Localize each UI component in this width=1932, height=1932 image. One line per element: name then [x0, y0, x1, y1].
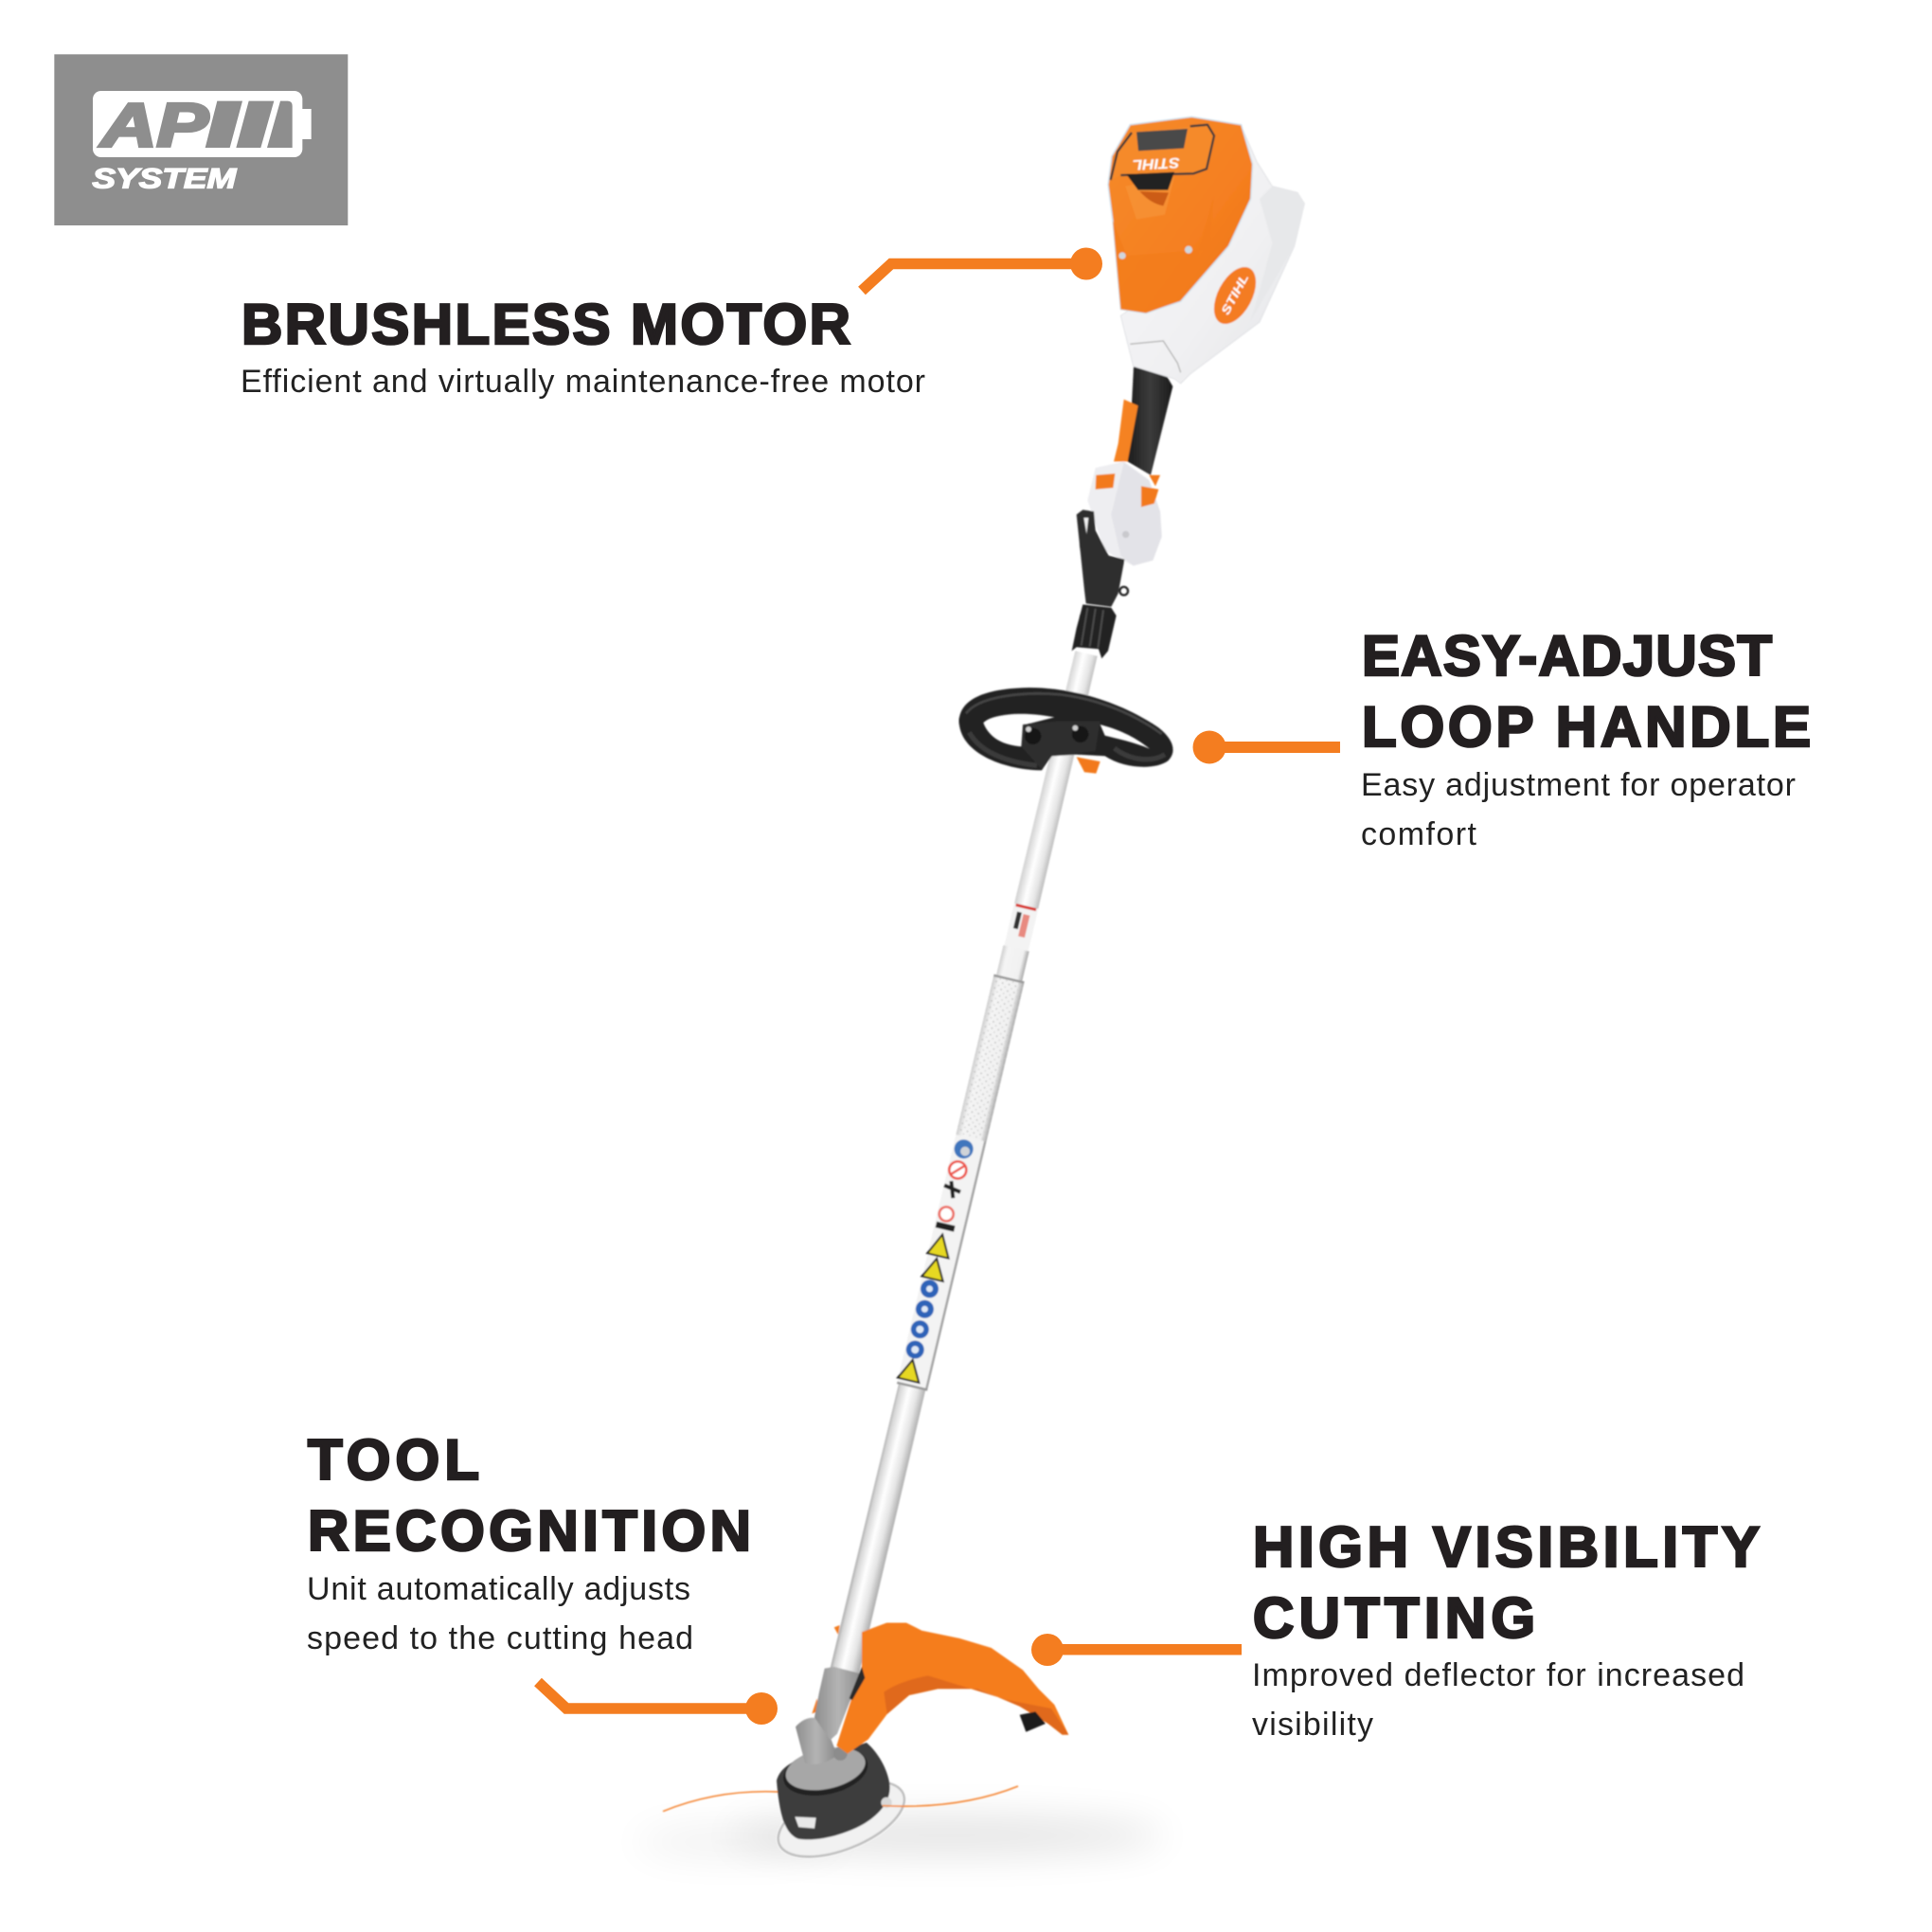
text: high visibility description: visibility — [1252, 1707, 1373, 1743]
heading: tool recognition — [308, 1428, 751, 1563]
logo: AP System badge — [54, 54, 348, 225]
logo text: SYSTEM: SYSTEM — [92, 163, 237, 194]
callout: tool recognition — [307, 1428, 778, 1725]
text: loop handle description — [1361, 767, 1796, 852]
heading: easy-adjust loop handle: LOOP HANDLE — [1362, 695, 1811, 759]
heading: tool recognition: TOOL — [308, 1428, 479, 1492]
black grip — [1128, 363, 1172, 475]
text: tool recognition description — [307, 1571, 693, 1656]
dark spool housing — [777, 1743, 892, 1839]
trimmer line — [663, 1792, 778, 1812]
gear housing dome — [778, 1718, 872, 1803]
text: tool recognition description: speed to the cutting head — [307, 1620, 693, 1656]
brand text on battery: STIHL — [1132, 154, 1180, 172]
loop handle — [959, 688, 1173, 770]
orange throttle lever — [1114, 400, 1138, 461]
ground shadow — [635, 1816, 1165, 1857]
cutting head and deflector — [663, 1622, 1068, 1872]
text: high visibility description: Improved deflector for increased — [1252, 1657, 1744, 1693]
textured sleeve — [956, 975, 1025, 1142]
white bump disc — [768, 1766, 915, 1872]
trimmer line right — [883, 1786, 1018, 1806]
text: high visibility description — [1252, 1657, 1744, 1743]
safety decal with icons — [896, 1135, 987, 1391]
white motor shell — [1120, 125, 1304, 384]
logo text: AP: AP — [98, 91, 209, 160]
heading: brushless motor: BRUSHLESS MOTOR — [242, 293, 850, 356]
collar — [996, 945, 1029, 981]
white switch block — [1087, 461, 1162, 565]
orange shaft clip — [1077, 757, 1100, 774]
battery pack — [1111, 125, 1214, 206]
shaft coupling — [814, 1667, 863, 1740]
heading: tool recognition: RECOGNITION — [308, 1499, 751, 1563]
shaft — [828, 650, 1101, 1680]
leader line: tool recognition — [538, 1682, 778, 1725]
dark hanger bracket — [1077, 510, 1128, 607]
callout: high visibility cutting — [1031, 1515, 1760, 1743]
heading: easy-adjust loop handle: EASY-ADJUST — [1362, 624, 1772, 688]
leader line: high visibility cutting — [1031, 1634, 1242, 1666]
callout: brushless motor — [241, 248, 1102, 400]
heading: high visibility cutting: CUTTING — [1253, 1586, 1535, 1650]
orange battery cover — [1108, 116, 1253, 313]
brand badge — [1206, 260, 1264, 331]
shaft locking collar — [1072, 604, 1117, 658]
orange deflector — [836, 1622, 1068, 1754]
cover screws — [1118, 246, 1192, 259]
text: loop handle description: Easy adjustment for operator — [1361, 767, 1796, 803]
heading: easy-adjust loop handle — [1362, 624, 1811, 759]
text: tool recognition description: Unit automatically adjusts — [307, 1571, 690, 1607]
string trimmer illustration — [635, 116, 1304, 1872]
text: brushless motor description: Efficient and virtually maintenance-free motor — [241, 364, 925, 400]
brand badge: STIHL — [1219, 272, 1251, 317]
icon: battery outline — [93, 91, 312, 157]
orange tabs behind shaft — [812, 1625, 840, 1713]
heading: high visibility cutting: HIGH VISIBILITY — [1253, 1515, 1760, 1579]
callout: easy-adjust loop handle — [1193, 624, 1811, 852]
warning label near collar — [1004, 903, 1038, 951]
leader line: brushless motor — [862, 248, 1102, 291]
heading: high visibility cutting — [1253, 1515, 1760, 1650]
motor housing — [1108, 116, 1304, 384]
text: loop handle description: comfort — [1361, 816, 1477, 852]
leader line: loop handle — [1193, 731, 1340, 763]
grip, switch block and shaft coupler — [959, 363, 1173, 774]
